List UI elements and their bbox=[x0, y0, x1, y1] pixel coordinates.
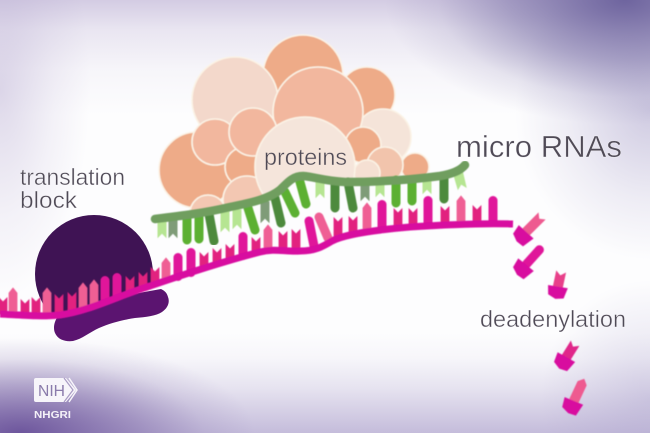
label: translation block: block bbox=[20, 187, 78, 213]
magenta backbone bbox=[0, 224, 513, 316]
protein cluster bbox=[159, 35, 429, 231]
grey green bases bbox=[169, 182, 369, 237]
bright green bases bbox=[187, 180, 412, 240]
large ribosome subunit bbox=[35, 215, 153, 313]
label: proteins: proteins bbox=[264, 144, 347, 170]
notched pink bases bbox=[0, 206, 481, 315]
NIH NHGRI logo: NIH bbox=[38, 383, 65, 400]
NIH NHGRI logo bbox=[34, 378, 77, 421]
dark green bases bbox=[209, 176, 444, 241]
label: translation block bbox=[20, 164, 125, 213]
micro RNA strand bbox=[155, 165, 466, 241]
magenta bases bbox=[100, 196, 498, 304]
nucleotide 2 bbox=[510, 240, 550, 281]
label: translation block: translation bbox=[20, 164, 125, 190]
ribosome bbox=[35, 215, 169, 341]
messenger RNA strand bbox=[0, 196, 513, 316]
small ribosome subunit bbox=[54, 289, 169, 341]
light green bases bbox=[158, 170, 466, 237]
nucleotide 4 bbox=[551, 338, 584, 374]
label: deadenylation: deadenylation bbox=[480, 306, 626, 332]
label: micro RNAs: micro RNAs bbox=[456, 129, 622, 164]
nucleotide 1 bbox=[510, 209, 549, 248]
green backbone bbox=[155, 165, 465, 219]
slanted light pink base bbox=[319, 217, 328, 238]
light pink bases bbox=[9, 196, 465, 316]
released nucleotides bbox=[510, 209, 593, 417]
nucleotide 5 bbox=[559, 374, 593, 417]
nucleotide 3 bbox=[546, 269, 571, 301]
NIH NHGRI logo: NHGRI bbox=[34, 409, 71, 421]
